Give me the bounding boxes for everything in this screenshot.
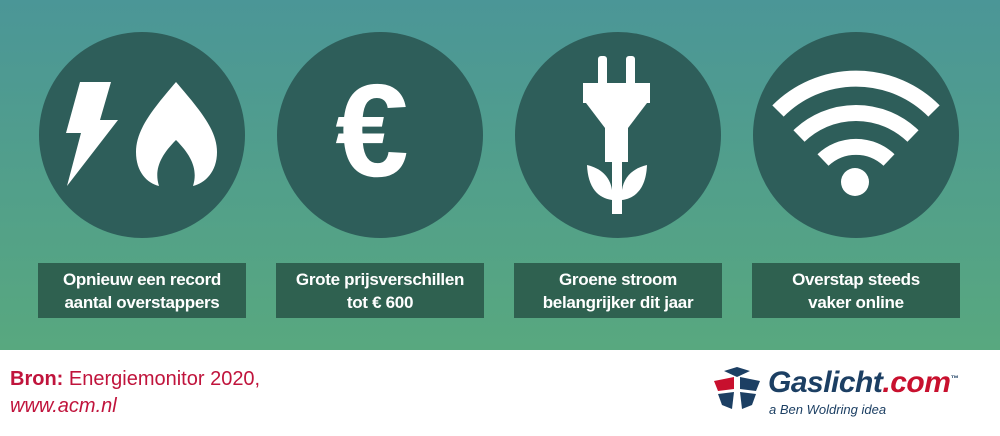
icon: flame: [136, 82, 217, 186]
circle 2: euro: [277, 32, 483, 238]
tagline: a Ben Woldring idea: [769, 402, 886, 417]
circle 1: electricity and gas: [39, 32, 245, 238]
source text: Bron: Energiemonitor 2020,: [10, 368, 260, 390]
circle 4: wifi: [753, 32, 959, 238]
icon: logo mark: [714, 367, 760, 409]
label 2: Grote prijsverschillen: [296, 270, 464, 288]
source text: www.acm.nl: [10, 395, 117, 417]
icon: euro sign: €: [335, 57, 409, 204]
source text: [10, 368, 260, 417]
label 1: aantal overstappers: [65, 292, 219, 312]
label 4: Overstap steeds: [792, 270, 920, 288]
label 3: Groene stroom: [559, 270, 677, 288]
label 4: vaker online: [808, 292, 904, 312]
label 3: belangrijker dit jaar: [543, 292, 693, 312]
label 2: [276, 263, 484, 318]
icon: wifi: [778, 79, 934, 160]
icon: lightning: [66, 82, 118, 186]
circle 3: green plug: [515, 32, 721, 238]
label 1: [38, 263, 246, 318]
label 2: tot € 600: [347, 292, 413, 312]
label 4: [752, 263, 960, 318]
label 1: Opnieuw een record: [63, 270, 221, 288]
label 3: [514, 263, 722, 318]
icon: plug with leaves: [583, 56, 650, 214]
logo text: Gaslicht.com™: [768, 366, 958, 399]
logo: Gaslicht.com: [714, 366, 958, 417]
